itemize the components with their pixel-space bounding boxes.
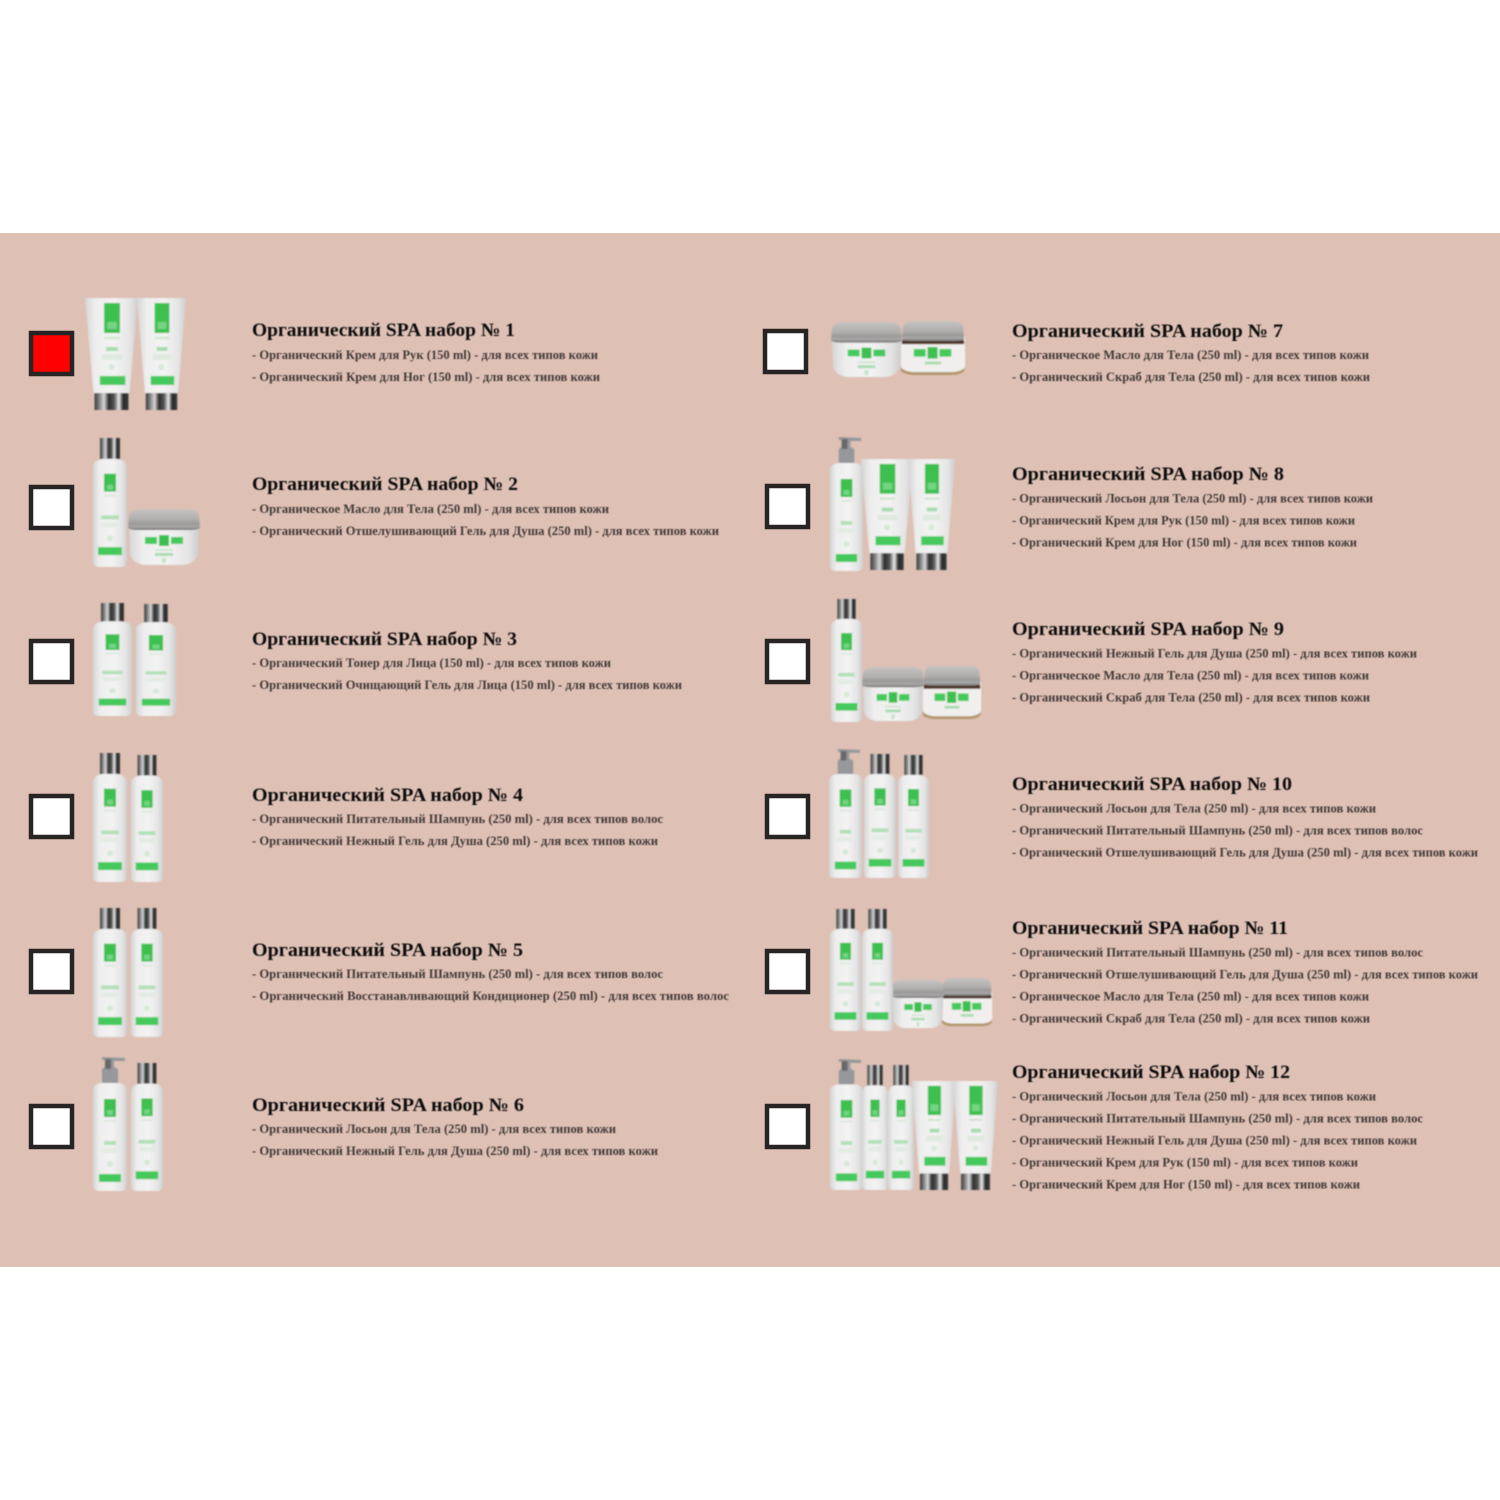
product image: pump and two bottles: [829, 749, 929, 878]
checkbox: [31, 487, 72, 528]
contents: set 12: - Органический Лосьон для Тела (250 ml) - для всех типов кожи: [1012, 1090, 1376, 1104]
heading: set 12: Органический SPA набор № 12: [1012, 1062, 1290, 1083]
heading: set 4: Органический SPA набор № 4: [252, 785, 524, 806]
set 11: [767, 909, 1478, 1031]
contents: set 8: - Органический Лосьон для Тела (250 ml) - для всех типов кожи: [1012, 492, 1373, 506]
product image: bottle and jar: [93, 438, 200, 567]
set 7: [765, 321, 1370, 384]
checkbox: [767, 796, 808, 837]
contents: set 11: - Органический Питательный Шампунь (250 ml) - для всех типов волос: [1012, 946, 1423, 960]
contents: set 6: [252, 1122, 658, 1158]
contents: set 4: - Органический Питательный Шампунь (250 ml) - для всех типов волос: [252, 812, 663, 826]
contents: set 6: - Органический Лосьон для Тела (250 ml) - для всех типов кожи: [252, 1122, 616, 1136]
checkbox: [767, 951, 808, 992]
heading: set 9: Органический SPA набор № 9: [1012, 619, 1284, 640]
product image: two bottles: [93, 753, 163, 882]
contents: set 2: [252, 502, 719, 538]
contents: set 1: - Органический Крем для Рук (150 ml) - для всех типов кожи: [252, 348, 598, 362]
product image: two bottles: [93, 603, 176, 716]
set 4: [31, 753, 663, 882]
heading: set 6: Органический SPA набор № 6: [252, 1095, 524, 1116]
contents: set 10: - Органический Лосьон для Тела (250 ml) - для всех типов кожи: [1012, 802, 1376, 816]
contents: set 12: [1012, 1090, 1423, 1192]
heading: set 3: Органический SPA набор № 3: [252, 629, 517, 650]
contents: set 7: - Органическое Масло для Тела (250 ml) - для всех типов кожи: [1012, 348, 1369, 362]
heading: set 10: Органический SPA набор № 10: [1012, 774, 1292, 795]
checkbox: [31, 951, 72, 992]
set 5: [31, 908, 729, 1037]
contents: set 12: - Органический Питательный Шампунь (250 ml) - для всех типов волос: [1012, 1112, 1423, 1126]
checkbox: [31, 796, 72, 837]
heading: set 1: Органический SPA набор № 1: [252, 320, 515, 341]
contents: set 6: - Органический Нежный Гель для Душа (250 ml) - для всех типов кожи: [252, 1144, 658, 1158]
heading: set 2: Органический SPA набор № 2: [252, 474, 518, 495]
product image: pump, two bottles and two tubes: [830, 1059, 998, 1190]
product image: two jars: [831, 321, 965, 377]
set 9: [767, 599, 1417, 722]
set 6: [31, 1057, 658, 1191]
contents: set 5: - Органический Восстанавливающий Кондиционер (250 ml) - для всех типов волос: [252, 989, 729, 1003]
product image: two bottles and two jars: [830, 909, 992, 1031]
heading: set 8: Органический SPA набор № 8: [1012, 464, 1284, 485]
set 8: [767, 437, 1373, 571]
contents: set 12: - Органический Крем для Ног (150 ml) - для всех типов кожи: [1012, 1178, 1360, 1192]
contents: set 8: [1012, 492, 1373, 550]
contents: set 2: - Органический Отшелушивающий Гель для Душа (250 ml) - для всех типов кожи: [252, 524, 719, 538]
product image: pump and bottle: [93, 1057, 163, 1191]
contents: set 1: [252, 348, 600, 384]
contents: set 5: [252, 967, 729, 1003]
contents: set 5: - Органический Питательный Шампунь (250 ml) - для всех типов волос: [252, 967, 663, 981]
product image: two tubes: [85, 298, 186, 410]
contents: set 10: - Органический Питательный Шампунь (250 ml) - для всех типов волос: [1012, 824, 1423, 838]
contents: set 1: - Органический Крем для Ног (150 ml) - для всех типов кожи: [252, 370, 600, 384]
set 12: [767, 1059, 1423, 1192]
heading: set 5: Органический SPA набор № 5: [252, 940, 523, 961]
heading: set 7: Органический SPA набор № 7: [1012, 321, 1284, 342]
contents: set 11: - Органический Отшелушивающий Гель для Душа (250 ml) - для всех типов кожи: [1012, 968, 1478, 982]
contents: set 4: - Органический Нежный Гель для Душа (250 ml) - для всех типов кожи: [252, 834, 658, 848]
set 1: [31, 298, 600, 410]
contents: set 7: [1012, 348, 1370, 384]
product image: bottle and two jars: [831, 599, 981, 722]
heading: set 11: Органический SPA набор № 11: [1012, 918, 1288, 939]
contents: set 9: - Органическое Масло для Тела (250 ml) - для всех типов кожи: [1012, 668, 1369, 682]
contents: set 10: - Органический Отшелушивающий Гель для Душа (250 ml) - для всех типов кожи: [1012, 846, 1478, 860]
contents: set 11: - Органическое Масло для Тела (250 ml) - для всех типов кожи: [1012, 990, 1369, 1004]
contents: set 12: - Органический Нежный Гель для Душа (250 ml) - для всех типов кожи: [1012, 1134, 1417, 1148]
contents: set 12: - Органический Крем для Рук (150 ml) - для всех типов кожи: [1012, 1156, 1358, 1170]
contents: set 3: [252, 656, 682, 692]
contents: set 9: [1012, 646, 1417, 704]
checkbox: selected: [31, 333, 72, 374]
contents: set 7: - Органический Скраб для Тела (250 ml) - для всех типов кожи: [1012, 370, 1370, 384]
contents: set 8: - Органический Крем для Рук (150 ml) - для всех типов кожи: [1012, 514, 1355, 528]
checkbox: [765, 331, 806, 372]
panel: product sets background: [0, 233, 1500, 1267]
set 10: [767, 749, 1478, 878]
checkbox: [31, 641, 72, 682]
checkbox: [31, 1106, 72, 1147]
checkbox: [767, 1106, 808, 1147]
contents: set 11: [1012, 946, 1478, 1026]
product image: two bottles: [93, 908, 163, 1037]
set 2: [31, 438, 719, 567]
checkbox: [767, 641, 808, 682]
checkbox: [767, 486, 808, 527]
set 3: [31, 603, 682, 716]
contents: set 9: - Органический Скраб для Тела (250 ml) - для всех типов кожи: [1012, 690, 1370, 704]
contents: set 8: - Органический Крем для Ног (150 ml) - для всех типов кожи: [1012, 536, 1357, 550]
contents: set 11: - Органический Скраб для Тела (250 ml) - для всех типов кожи: [1012, 1012, 1370, 1026]
contents: set 10: [1012, 802, 1478, 860]
contents: set 3: - Органический Тонер для Лица (150 ml) - для всех типов кожи: [252, 656, 611, 670]
contents: set 3: - Органический Очищающий Гель для Лица (150 ml) - для всех типов кожи: [252, 678, 682, 692]
contents: set 4: [252, 812, 663, 848]
contents: set 2: - Органическое Масло для Тела (250 ml) - для всех типов кожи: [252, 502, 609, 516]
contents: set 9: - Органический Нежный Гель для Душа (250 ml) - для всех типов кожи: [1012, 646, 1417, 660]
product image: pump and two tubes: [830, 437, 955, 571]
